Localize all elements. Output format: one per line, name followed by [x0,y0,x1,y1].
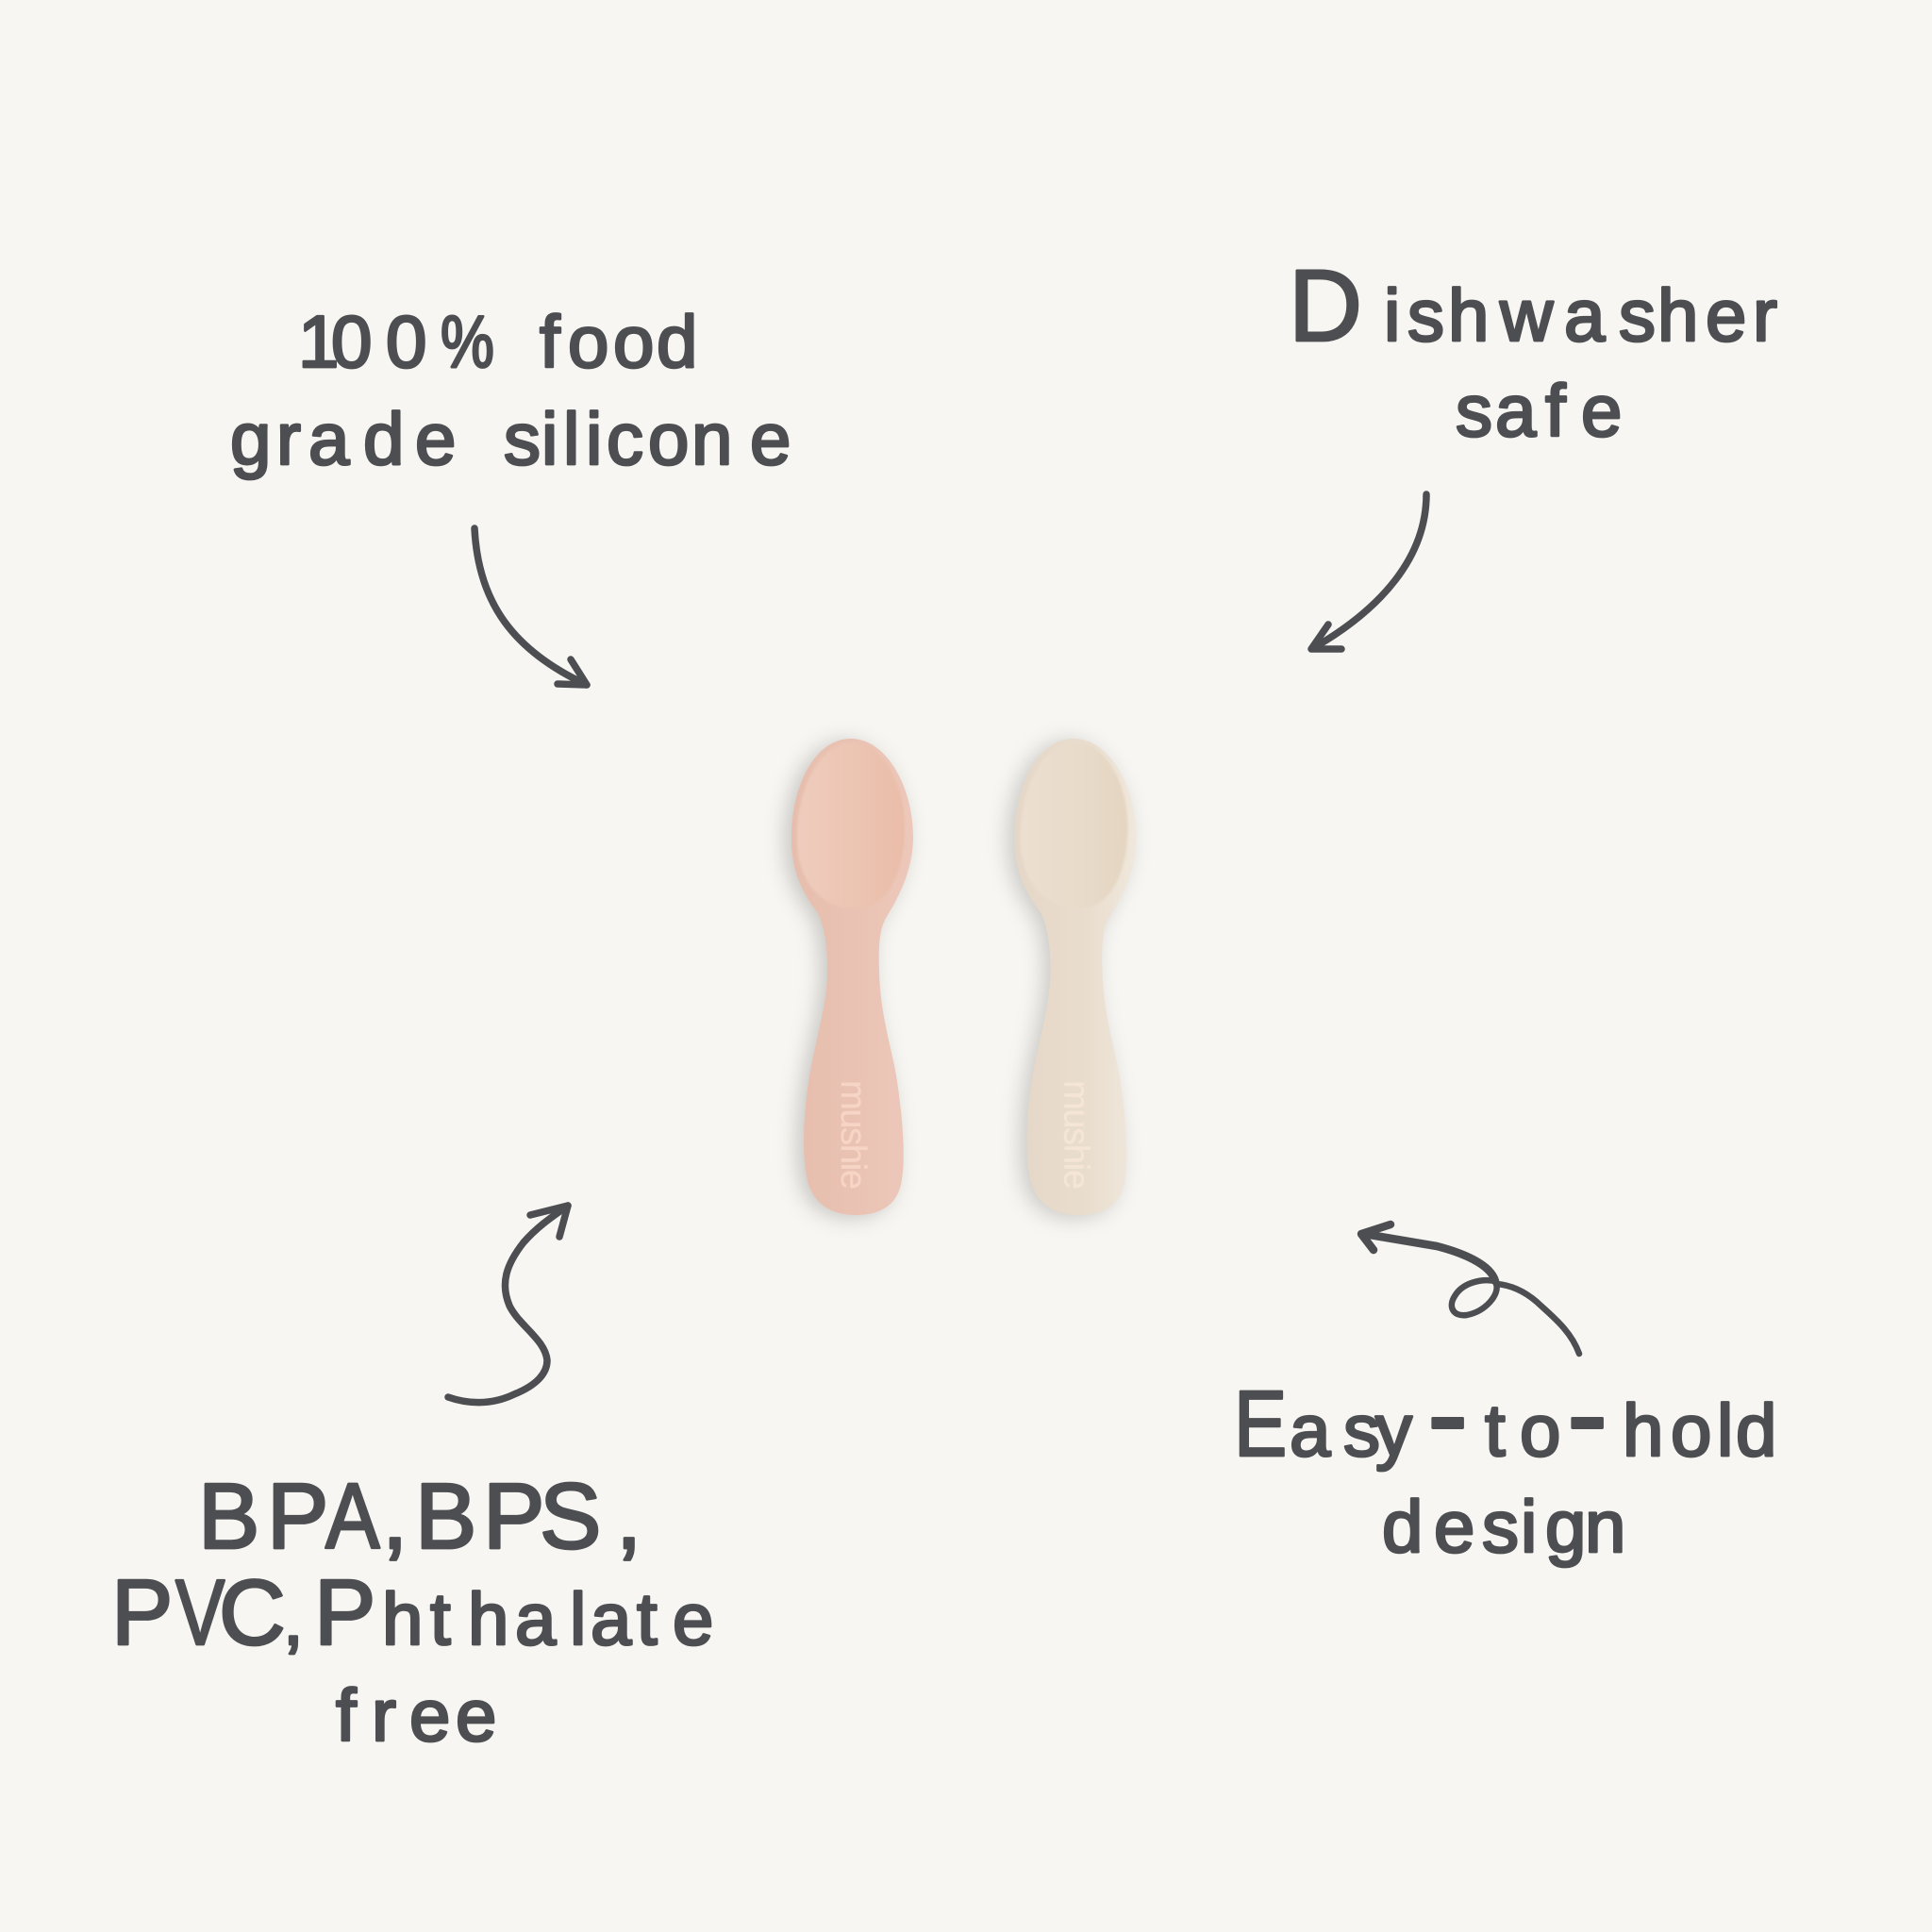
callout: BPA, BPS, PVC, Phthalate free: V [175,1561,225,1664]
callout: easy-to-hold design [1234,1344,1776,1568]
callout: BPA, BPS, PVC, Phthalate free: free [336,1674,496,1757]
callout: BPA, BPS, PVC, Phthalate free: , [283,1577,304,1660]
callout: BPA, BPS, PVC, Phthalate free: C [219,1560,286,1664]
callout: 100% food grade silicone: 00 [331,300,426,383]
callout: 100% food grade silicone [230,300,791,480]
arrow: BPA free to spoons [448,1206,568,1403]
callout: easy-to-hold design: asy [1290,1389,1412,1472]
callout: dishwasher safe [1289,248,1777,452]
callout: easy-to-hold design: hold [1623,1389,1776,1472]
callout: easy-to-hold design: - [1567,1344,1607,1482]
callout: 100% food grade silicone: food [540,300,697,383]
brand mark: mushie on sand spoon: mushie [1057,1080,1096,1190]
arrow: food grade silicone to spoons [475,528,587,685]
callout: easy-to-hold design: E [1234,1373,1287,1475]
callout: BPA, BPS, PVC, Phthalate free: P [314,1560,375,1664]
callout: BPA, BPS, PVC, Phthalate free: BP [198,1464,328,1568]
callout: dishwasher safe: D [1289,248,1362,362]
callout: dishwasher safe: safe [1456,369,1622,452]
callout: 100% food grade silicone: grade silicone [230,397,791,480]
spoon: blush [785,739,913,1218]
callout: easy-to-hold design: design [1382,1485,1625,1568]
brand mark: mushie on blush spoon: mushie [833,1080,873,1190]
callout: BPA, BPS, PVC, Phthalate free: P [111,1560,173,1664]
arrow: easy-to-hold to spoons [1361,1224,1579,1354]
spoon: shifting sand [1008,739,1136,1218]
arrow: dishwasher safe to spoons [1311,494,1426,649]
callout: dishwasher safe: ishwasher [1384,274,1777,357]
callout: easy-to-hold design: - [1427,1344,1468,1482]
spoon pair [785,739,1136,1218]
callout: BPA, BPS, PVC, Phthalate free: , BPS, [382,1464,641,1568]
callout: 100% food grade silicone: % [441,301,494,383]
callout: easy-to-hold design: to [1485,1389,1560,1472]
callout: BPA, BPS, PVC, Phthalate free: hthalate [382,1577,713,1660]
callout: 100% food grade silicone: 1 [298,300,339,383]
callout: BPA, BPS, PVC, Phthalate free [111,1464,713,1757]
callout: BPA, BPS, PVC, Phthalate free: A [325,1464,380,1568]
